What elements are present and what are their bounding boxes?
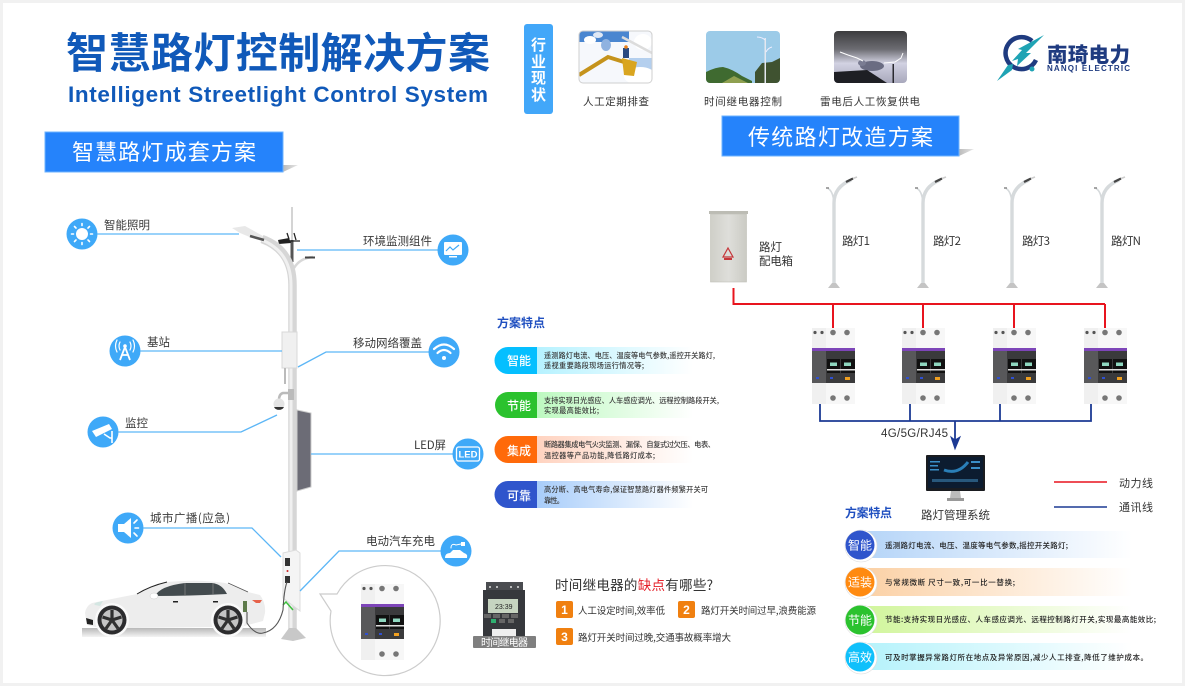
street light 2: 路灯2 (933, 233, 961, 249)
item 1 (556, 601, 665, 618)
label: base station: 基站 (147, 334, 170, 350)
item 1: 人工设定时间,效率低 (578, 603, 665, 617)
logo: 南琦电力 (1047, 38, 1130, 68)
street light N: 路灯N (1111, 233, 1141, 249)
heading: features: 方案特点 (497, 314, 545, 331)
tag: industry status: 现 (531, 67, 546, 88)
label: environment monitoring (297, 233, 468, 266)
item 2: 2 (683, 603, 690, 617)
feature: smart (845, 530, 1132, 562)
label: mobile coverage: 移动网络覆盖 (353, 335, 422, 351)
time relay device (473, 582, 536, 649)
tag: industry status (524, 24, 553, 114)
heading banner: retrofit solution (722, 116, 974, 156)
time relay device: 时间继电器 (481, 634, 528, 649)
feature: smart: 遥测路灯电流、电压、温度等电气参数,摇控开关路灯; (885, 540, 1068, 551)
feature: fit: 与常规微断 尺寸一致,可一比一替换; (885, 577, 1015, 588)
photo: time relay control (704, 31, 782, 109)
feature: reliable: 可靠 (507, 487, 531, 504)
power wiring (734, 288, 1105, 328)
panel: solution features right (845, 504, 1156, 674)
communication wiring with arrow: 4G/5G/RJ45 (881, 428, 948, 440)
management system monitor (921, 455, 990, 523)
photo: manual recovery after lightning: 雷电后人工恢复供电 (820, 94, 920, 109)
distribution cabinet: 路灯 (759, 239, 782, 255)
feature: energy saving: 实现最高能效比; (544, 406, 599, 416)
feature: smart: 遥测路灯电流、电压、温度等电气参数,遥控开关路灯, (544, 351, 715, 361)
feature: smart: 智能 (507, 352, 531, 369)
feature: reliable (495, 481, 708, 508)
feature: reliable: 高分断、高电气寿命,保证智慧路灯器件频繁开关可 (544, 485, 708, 495)
photo: manual recovery after lightning (820, 31, 920, 109)
photo: manual inspection: 人工定期排查 (583, 94, 650, 109)
label: city broadcast: 城市广播(应急) (150, 510, 230, 526)
feature: smart: 遥视重要路段现场运行情况等; (544, 361, 644, 371)
feature: efficient (845, 642, 1148, 674)
label: smart lighting (66, 217, 239, 250)
time relay device: 23:39 (495, 604, 513, 611)
smart street pole (232, 207, 315, 641)
electric car (82, 581, 287, 637)
feature: integration (495, 436, 715, 463)
title: 智慧路灯控制解决方案 (66, 20, 490, 81)
feature: integration: 集成 (507, 442, 531, 459)
label: mobile coverage (298, 335, 460, 368)
label: LED screen: LED屏 (414, 437, 446, 453)
communication wiring with arrow (820, 404, 1091, 449)
label: LED screen: LED (458, 450, 478, 460)
item 1: 1 (561, 603, 568, 617)
street light 1 (826, 177, 870, 288)
feature: energy saving (845, 605, 1156, 637)
feature: fit: 适装 (848, 574, 872, 590)
title: Intelligent Streetlight Control System (68, 82, 488, 107)
heading banner: complete solution: 智慧路灯成套方案 (72, 135, 256, 167)
heading banner: complete solution (45, 132, 298, 172)
label: EV charging (300, 533, 472, 591)
management system monitor: 路灯管理系统 (921, 507, 990, 523)
feature: fit (845, 567, 1132, 599)
street light N (1094, 177, 1141, 288)
label: city broadcast (112, 510, 281, 557)
legend (1054, 475, 1153, 515)
item 3: 路灯开关时间过晚,交通事故概率增大 (578, 630, 731, 644)
feature: integration: 温控器等产品功能,降低路灯成本; (544, 451, 655, 461)
label: surveillance (88, 415, 277, 448)
tag: industry status: 行 (531, 34, 546, 55)
feature: energy saving: 支持实现日光感应、人车感应调光、远程控制路段开关, (544, 396, 719, 406)
photo: time relay control: 时间继电器控制 (704, 94, 782, 109)
feature: efficient: 高效 (848, 648, 872, 666)
label: LED screen (311, 437, 484, 470)
feature: efficient: 可及时掌握异常路灯所在地点及异常原因,减少人工排查,降低了维护成本。 (885, 652, 1148, 663)
item 3: 3 (561, 630, 568, 644)
feature: reliable: 靠性。 (544, 496, 564, 506)
street light 3 (1004, 177, 1050, 288)
distribution cabinet: 配电箱 (759, 253, 793, 269)
feature: energy saving (495, 392, 719, 418)
feature: energy saving: 节能 (848, 612, 872, 628)
logo: NANQI ELECTRIC (1047, 64, 1130, 73)
street light 2 (915, 177, 961, 288)
label: smart lighting: 智能照明 (104, 217, 150, 233)
feature: integration: 断路器集成电气火灾监测、漏保、自复式过欠压、电表、 (544, 440, 715, 450)
heading banner: retrofit solution: 传统路灯改造方案 (748, 120, 933, 152)
legend: 动力线 (1119, 475, 1153, 491)
street light 3: 路灯3 (1022, 233, 1050, 249)
feature: energy saving: 节能:支持实现日光感应、人车感应调光、远程控制路灯开关,实现最高能效比; (885, 614, 1156, 625)
feature: smart (495, 347, 715, 374)
tag: industry status: 状 (531, 84, 546, 105)
feature: energy saving: 节能 (507, 397, 531, 414)
photo: manual inspection (579, 31, 656, 109)
logo (997, 35, 1130, 81)
feature: smart: 智能 (848, 536, 872, 554)
heading: features: 方案特点 (845, 504, 892, 521)
item 2: 路灯开关时间过早,浪费能源 (701, 603, 816, 617)
label: EV charging: 电动汽车充电 (366, 533, 436, 549)
panel: solution features left (495, 314, 719, 508)
panel: time relay drawbacks (555, 574, 816, 645)
callout: smart breaker (320, 566, 440, 676)
label: surveillance: 监控 (125, 415, 148, 431)
item 2 (678, 601, 816, 618)
label: environment monitoring: 环境监测组件 (363, 233, 432, 249)
legend: 通讯线 (1119, 499, 1153, 515)
tag: industry status: 业 (531, 51, 546, 72)
street light 1: 路灯1 (842, 233, 870, 249)
breakers row (812, 328, 1127, 404)
distribution cabinet (709, 211, 793, 282)
label: base station (110, 334, 282, 366)
heading: drawbacks: 时间继电器的缺点有哪些? (555, 574, 713, 594)
